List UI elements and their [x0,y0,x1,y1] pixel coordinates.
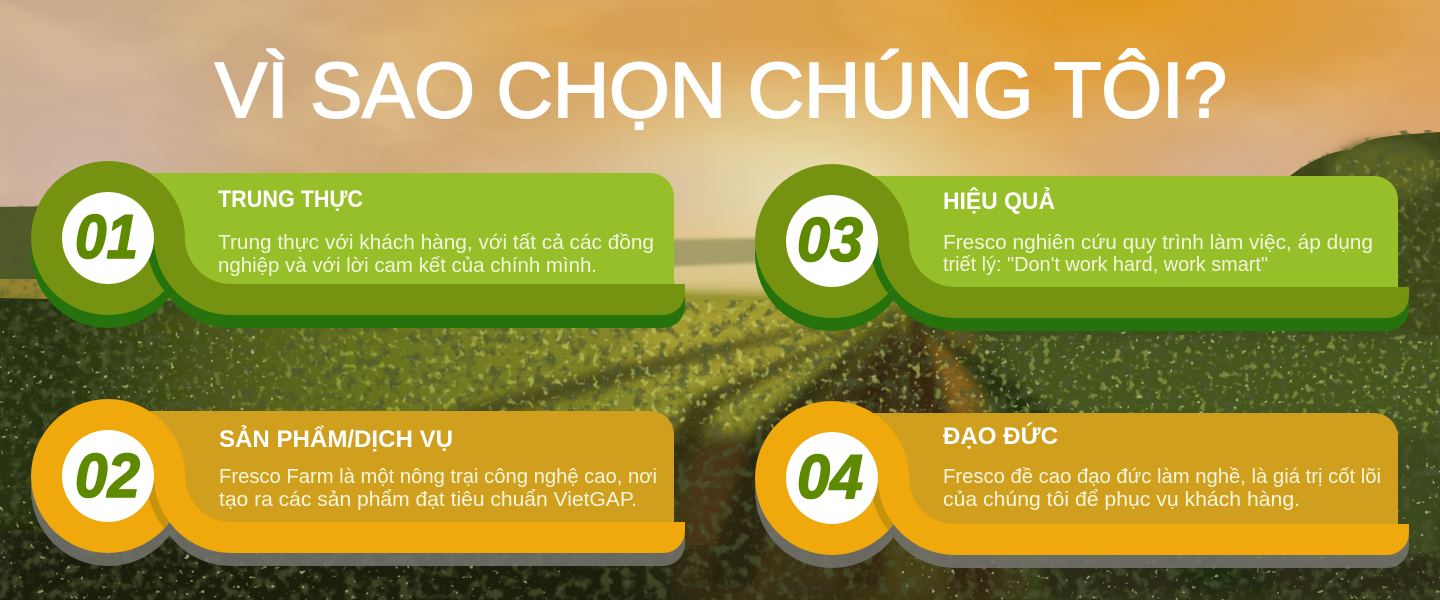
panel: card 04 Đạo đức [755,401,1409,568]
card 02 ribbon band [154,476,685,553]
card 04 drop shadow [755,414,1409,568]
card 04 heading: ĐẠO ĐỨC [943,422,1058,450]
ground base [0,262,1440,600]
card 03 drop shadow [755,177,1409,331]
card 03 description: Fresco nghiên cứu quy trình làm việc, áp dụng [943,232,1373,254]
card 01 inner shadow crescent [146,238,170,291]
card 01 heading: TRUNG THỰC [218,186,363,213]
card 04 number: 04 [797,443,863,512]
card 01 number: 01 [75,203,138,272]
card 03 light panel [874,176,1398,287]
panel: card 02 Sản phẩm/Dịch vụ [31,399,685,566]
panel: card 03 Hiệu quả [755,164,1409,331]
card 03 description: triết lý: "Don't work hard, work smart" [943,254,1268,276]
card 01 number ring [31,161,185,315]
card 04 ribbon band [878,478,1409,555]
card 03 number: 03 [797,206,863,275]
right tree line [1290,132,1440,340]
card 01 drop shadow [31,174,685,328]
left dark hedge [0,298,600,600]
card 04 inner shadow crescent [870,478,894,531]
card 02 heading: SẢN PHẨM/DỊCH VỤ [219,424,453,453]
card 02 number ring [31,399,185,553]
card 03 heading: HIỆU QUẢ [943,186,1055,215]
card 04 number ring [755,401,909,555]
vineyard rows [410,305,1270,590]
card 01 description: Trung thực với khách hàng, với tất cả các đồng [218,232,654,254]
card 04 white number disc [786,432,878,524]
card 04 light panel [874,413,1398,524]
right vines [905,240,1440,600]
title: VÌ SAO CHỌN CHÚNG TÔI? [215,46,1227,134]
card 04 description: Fresco đề cao đạo đức làm nghề, là giá trị cốt lõi [943,466,1381,488]
centre sunlit field [60,292,905,440]
card 03 ribbon band [878,241,1409,318]
card 03 number ring [755,164,909,318]
card 03 inner shadow crescent [870,241,894,294]
card 01 white number disc [62,192,154,284]
card 04 description: của chúng tôi để phục vụ khách hàng. [943,489,1300,511]
card 01 light panel [150,173,674,284]
card 03 white number disc [786,195,878,287]
card 02 light panel [150,411,674,522]
card 02 description: Fresco Farm là một nông trại công nghệ cao, nơi [219,466,657,488]
card 01 ribbon band [154,238,685,315]
panel: card 01 Trung thực [31,161,685,328]
card 02 description: tạo ra các sản phẩm đạt tiêu chuẩn VietGAP. [219,489,637,511]
card 02 number: 02 [75,442,140,511]
card 02 white number disc [62,430,154,522]
foliage texture [0,130,1440,600]
card 02 inner shadow crescent [146,476,170,529]
card 01 description: nghiệp và với lời cam kết của chính mình. [218,255,597,277]
central dark rows [690,330,1040,600]
card 02 drop shadow [31,412,685,566]
